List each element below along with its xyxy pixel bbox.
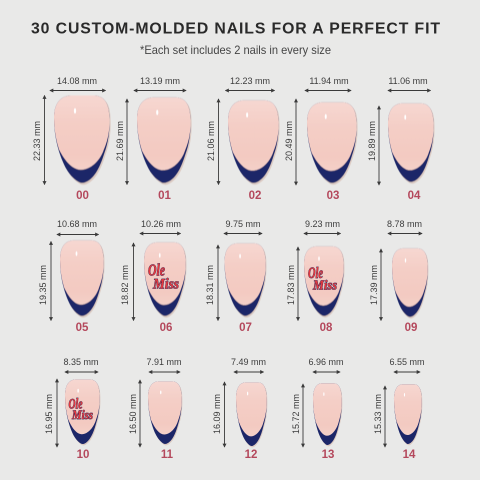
height 14: 15.33 mm (373, 394, 383, 434)
height 11: 16.50 mm (128, 394, 138, 434)
number 00: 00 (76, 190, 89, 202)
logo 10: Ole (68, 396, 83, 412)
number 03: 03 (327, 190, 339, 202)
width 08: 9.23 mm (305, 219, 340, 229)
logo 10: Miss (71, 407, 93, 422)
number 09: 09 (405, 322, 417, 334)
number 04: 04 (408, 190, 421, 202)
nail 01 (137, 97, 192, 185)
width 10: 8.35 mm (63, 357, 99, 367)
height 04: 19.89 mm (367, 121, 377, 161)
nail 11 (148, 381, 182, 445)
height 08: 17.83 mm (286, 265, 296, 305)
title: 30 CUSTOM-MOLDED NAILS FOR A PERFECT FIT (31, 20, 440, 38)
nail 03 (307, 102, 358, 185)
number 05: 05 (76, 322, 89, 334)
number 12: 12 (245, 449, 257, 461)
width 11: 7.91 mm (146, 357, 182, 367)
number 14: 14 (403, 449, 416, 461)
width 00: 14.08 mm (57, 76, 97, 86)
number 01: 01 (158, 190, 171, 202)
number 08: 08 (320, 322, 333, 334)
size 06 (120, 219, 186, 334)
logo 10 (68, 396, 93, 422)
height 05: 19.35 mm (38, 265, 48, 305)
logo 06 (148, 260, 179, 292)
width 07: 9.75 mm (225, 219, 261, 229)
nail 07 (224, 243, 266, 318)
number 06: 06 (160, 322, 172, 334)
width 02: 12.23 mm (230, 76, 270, 86)
size 01 (115, 76, 192, 202)
number 13: 13 (322, 449, 334, 461)
logo 06: Ole (148, 260, 165, 280)
size 07 (205, 219, 266, 334)
size 11 (128, 357, 182, 461)
nail 08 (304, 246, 344, 317)
logo 08 (308, 265, 337, 294)
size 04 (367, 76, 435, 202)
height 03: 20.49 mm (284, 121, 294, 161)
logo 08: Ole (308, 265, 323, 282)
nail 04 (388, 103, 435, 184)
nail 09 (392, 248, 428, 318)
number 10: 10 (77, 449, 89, 461)
nail 12 (236, 382, 267, 447)
size 05 (38, 219, 105, 334)
nail 02 (228, 100, 280, 185)
size 03 (284, 76, 358, 202)
width 05: 10.68 mm (57, 219, 97, 229)
size 12 (212, 357, 267, 461)
number 07: 07 (239, 322, 252, 334)
number 11: 11 (161, 449, 174, 461)
size 09 (369, 219, 428, 334)
width 14: 6.55 mm (389, 357, 425, 367)
height 01: 21.69 mm (115, 121, 125, 161)
nail 14 (394, 384, 422, 445)
width 13: 6.96 mm (308, 357, 344, 367)
logo 06: Miss (152, 276, 179, 292)
height 12: 16.09 mm (212, 394, 222, 434)
size 00 (32, 76, 111, 202)
height 06: 18.82 mm (120, 265, 130, 305)
width 04: 11.06 mm (388, 76, 428, 86)
size 02 (206, 76, 280, 202)
size 08 (286, 219, 344, 334)
height 13: 15.72 mm (291, 394, 301, 434)
size 10 (44, 357, 100, 461)
height 09: 17.39 mm (369, 265, 379, 305)
nail 05 (60, 240, 105, 318)
width 12: 7.49 mm (231, 357, 266, 367)
size 13 (291, 357, 344, 461)
width 03: 11.94 mm (309, 76, 349, 86)
width 01: 13.19 mm (140, 76, 180, 86)
number 02: 02 (249, 190, 261, 202)
height 02: 21.06 mm (206, 121, 216, 161)
height 00: 22.33 mm (32, 121, 42, 161)
size 14 (373, 357, 425, 461)
nail 10 (65, 379, 100, 445)
height 10: 16.95 mm (44, 394, 54, 434)
width 06: 10.26 mm (141, 219, 181, 229)
nail 13 (313, 383, 342, 446)
nail 00 (54, 95, 111, 185)
height 07: 18.31 mm (205, 265, 215, 305)
nail 06 (144, 242, 186, 318)
subtitle note: *Each set includes 2 nails in every size (140, 43, 331, 57)
logo 08: Miss (312, 278, 337, 294)
width 09: 8.78 mm (387, 219, 422, 229)
